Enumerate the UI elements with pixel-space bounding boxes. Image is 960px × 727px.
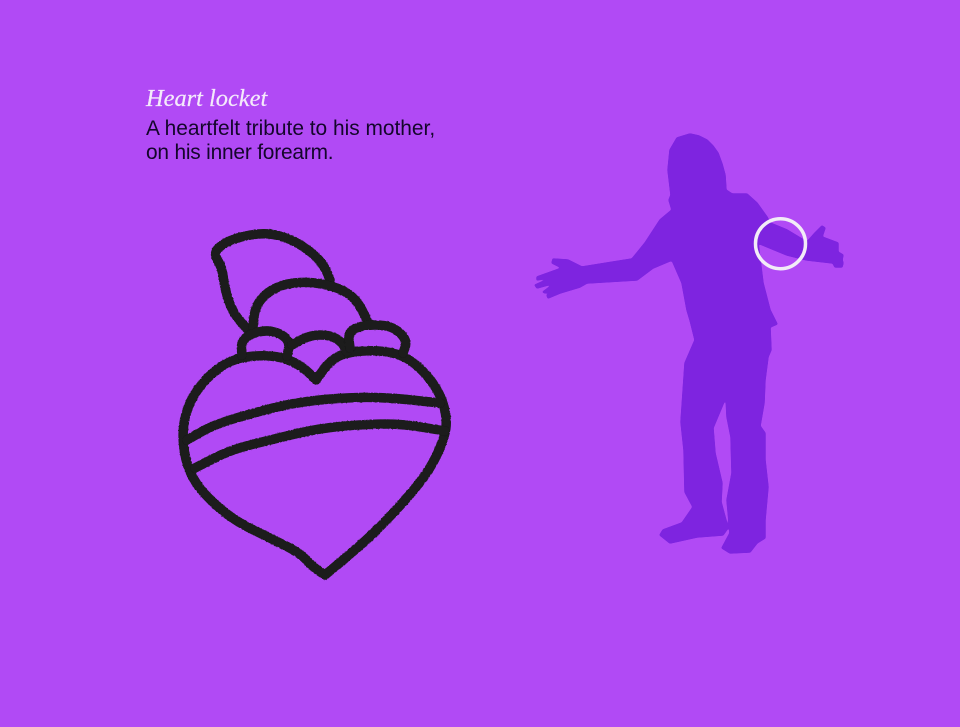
middle bump — [292, 335, 347, 352]
description — [146, 117, 435, 164]
figure silhouette — [535, 134, 843, 553]
left bump — [241, 331, 289, 356]
description: on his inner forearm. — [146, 141, 333, 164]
lower band — [195, 424, 445, 468]
top oval — [253, 282, 367, 327]
title: Heart locket — [146, 85, 267, 112]
leaf shape — [216, 234, 330, 330]
location marker circle — [756, 219, 806, 269]
text block: heading and description — [146, 85, 435, 164]
heart outline — [183, 351, 446, 575]
upper band — [187, 397, 440, 440]
right bump — [349, 325, 406, 353]
description: A heartfelt tribute to his mother, — [146, 117, 435, 140]
tattoo illustration: heart locket — [183, 234, 446, 575]
